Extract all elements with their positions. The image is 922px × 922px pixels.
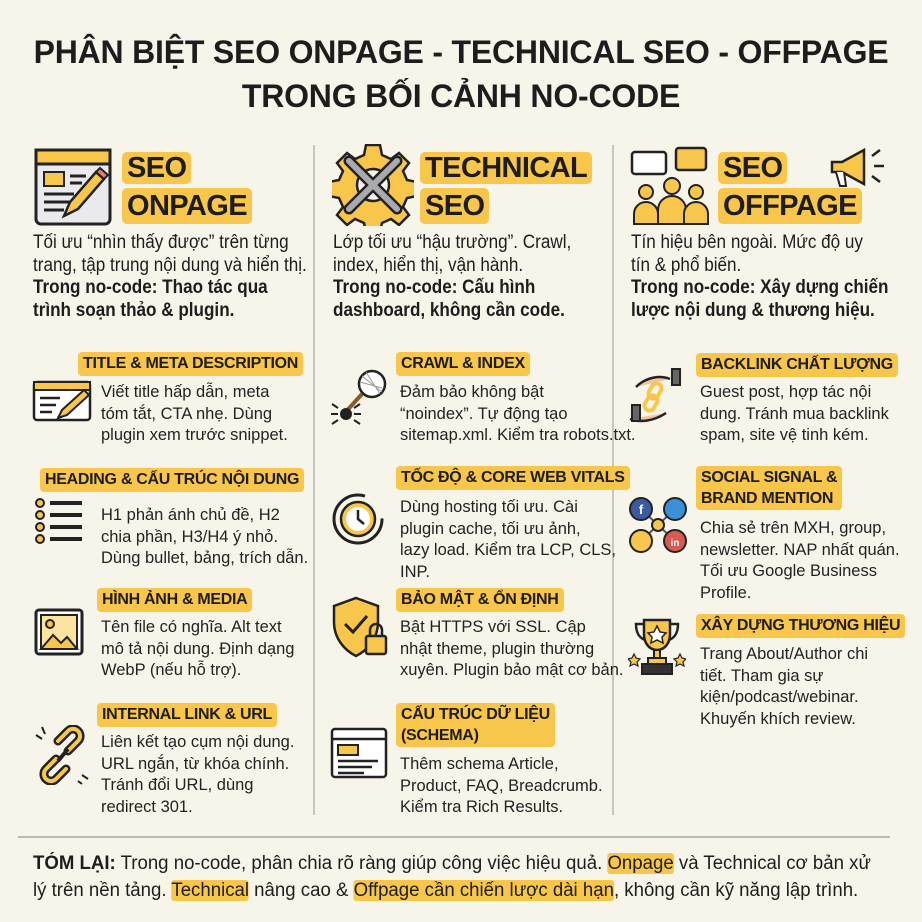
- sub: images: mô tả nội dung. Định dạng: [101, 638, 294, 658]
- intro text: tín & phổ biến.: [631, 254, 741, 276]
- sub: images: HÌNH ẢNH & MEDIA: [102, 591, 247, 608]
- sub: crawl: [331, 352, 636, 444]
- summary text: [33, 852, 871, 901]
- sub: backlink: dung. Tránh mua backlink: [700, 404, 889, 422]
- sub: internal link: Tránh đổi URL, dùng: [101, 775, 253, 794]
- sub: speed: TỐC ĐỘ & CORE WEB VITALS: [401, 469, 625, 486]
- sub: internal link: [36, 703, 294, 816]
- panel: seo offpage: [630, 146, 888, 320]
- sub: heading: [35, 468, 308, 567]
- heading: OFFPAGE: [723, 190, 857, 222]
- sub: title meta: Viết title hấp dẫn, meta: [101, 382, 269, 401]
- sub: schema: Product, FAQ, Breadcrumb.: [400, 776, 603, 794]
- intro text: Tối ưu “nhìn thấy được” trên từng: [33, 232, 289, 253]
- sub: schema: Kiểm tra Rich Results.: [400, 797, 563, 816]
- intro text: Trong no-code: Thao tác qua: [33, 277, 268, 298]
- sub: security: BẢO MẬT & ỔN ĐỊNH: [401, 591, 559, 608]
- icon: people with megaphone: [630, 146, 709, 225]
- sub: images: WebP (nếu hỗ trợ).: [101, 660, 241, 679]
- sub: backlink: [630, 353, 898, 444]
- title: TRONG BỐI CẢNH NO-CODE: [242, 78, 680, 114]
- sub: title meta: tóm tắt, CTA nhẹ. Dùng: [101, 404, 272, 422]
- sub: security: xuyên. Plugin bảo mật cơ bản.: [400, 660, 623, 679]
- sub: security: nhật theme, plugin thường: [400, 638, 594, 658]
- sub: crawl: sitemap.xml. Kiểm tra robots.txt.: [400, 425, 636, 444]
- sub: social: Tối ưu Google Business: [700, 561, 877, 580]
- sub: social: SOCIAL SIGNAL &: [701, 469, 837, 486]
- sub: crawl: Đảm bảo không bật: [400, 382, 544, 401]
- icon: browser pencil: [34, 148, 112, 226]
- intro text: trang, tập trung nội dung và hiển thị.: [33, 254, 307, 276]
- heading: SEO: [127, 152, 186, 184]
- sub: speed: plugin cache, tối ưu ảnh,: [400, 518, 581, 538]
- sub: backlink: BACKLINK CHẤT LƯỢNG: [701, 356, 893, 373]
- intro text: Trong no-code: Xây dựng chiến: [631, 277, 888, 298]
- icon: gear wrench: [332, 144, 414, 226]
- sub: social: f: [639, 502, 644, 517]
- sub: brand: kiện/podcast/webinar.: [700, 687, 859, 706]
- heading: [718, 152, 862, 224]
- sub: images: Tên file có nghĩa. Alt text: [101, 617, 282, 636]
- sub: speed: INP.: [400, 562, 430, 580]
- sub: schema: Thêm schema Article,: [400, 754, 559, 773]
- sub: brand: tiết. Tham gia sự: [700, 666, 823, 684]
- sub: schema: CẤU TRÚC DỮ LIỆU: [401, 706, 550, 723]
- summary text: lý trên nền tảng. Technical nâng cao & Offpage cần chiến lược dài hạn, không cần kỹ năng lập trình.: [33, 880, 858, 901]
- sub: title meta: plugin xem trước snippet.: [101, 425, 288, 444]
- heading: SEO: [723, 152, 782, 184]
- intro text: dashboard, không cần code.: [333, 300, 565, 320]
- heading: TECHNICAL: [425, 152, 587, 184]
- sub: schema: (SCHEMA): [401, 727, 479, 744]
- panel: technical seo: [332, 144, 592, 320]
- sub: speed: lazy load. Kiểm tra LCP, CLS,: [400, 540, 616, 559]
- intro text: Tín hiệu bên ngoài. Mức độ uy: [631, 232, 863, 253]
- sub: social: [629, 466, 900, 602]
- sub: social: in: [671, 538, 679, 549]
- summary text: TÓM LẠI: Trong no-code, phân chia rõ ràng giúp công việc hiệu quả. Onpage và Technical cơ bản xử: [33, 853, 871, 874]
- sub: crawl: “noindex”. Tự động tạo: [400, 404, 568, 422]
- sub: social: BRAND MENTION: [701, 490, 833, 507]
- sub: heading: H1 phản ánh chủ đề, H2: [101, 505, 280, 524]
- sub: internal link: URL ngắn, từ khóa chính.: [101, 754, 289, 772]
- sub: internal link: INTERNAL LINK & URL: [102, 706, 272, 723]
- sub: title meta: [32, 352, 303, 444]
- sub: internal link: Liên kết tạo cụm nội dung.: [101, 732, 294, 751]
- sub: brand: XÂY DỰNG THƯƠNG HIỆU: [701, 617, 900, 634]
- sub: internal link: redirect 301.: [101, 796, 193, 816]
- title: PHÂN BIỆT SEO ONPAGE - TECHNICAL SEO - OFFPAGE: [34, 34, 888, 70]
- intro text: trình soạn thảo & plugin.: [33, 300, 234, 320]
- panel: seo onpage: [33, 148, 307, 320]
- sub: heading: HEADING & CẤU TRÚC NỘI DUNG: [45, 471, 299, 488]
- intro text: Trong no-code: Cấu hình: [333, 277, 535, 298]
- sub: backlink: spam, site vệ tinh kém.: [700, 425, 869, 444]
- sub: social: Chia sẻ trên MXH, group,: [700, 518, 886, 537]
- title: [34, 34, 888, 114]
- sub: security: Bật HTTPS với SSL. Cập: [400, 617, 586, 636]
- sub: images: [34, 588, 294, 679]
- sub: heading: chia phần, H3/H4 ý nhỏ.: [101, 526, 278, 546]
- intro text: [631, 232, 888, 320]
- sub: heading: Dùng bullet, bảng, trích dẫn.: [101, 548, 308, 567]
- intro text: Lớp tối ưu “hậu trường”. Crawl,: [333, 232, 571, 253]
- sub: speed: Dùng hosting tối ưu. Cài: [400, 497, 578, 516]
- sub: backlink: Guest post, hợp tác nội: [700, 382, 871, 401]
- sub: schema: [330, 703, 603, 816]
- heading: [122, 152, 252, 224]
- sub: brand: Khuyến khích review.: [700, 708, 856, 728]
- sub: social: Profile.: [700, 582, 751, 602]
- sub: crawl: CRAWL & INDEX: [401, 355, 525, 372]
- heading: SEO: [425, 190, 484, 222]
- sub: social: newsletter. NAP nhất quán.: [700, 540, 900, 558]
- sub: brand: [628, 614, 905, 728]
- intro text: index, hiển thị, vận hành.: [333, 254, 523, 276]
- heading: [420, 152, 592, 224]
- intro text: lược nội dung & thương hiệu.: [631, 300, 875, 320]
- intro text: [33, 232, 307, 320]
- sub: speed: [332, 466, 630, 580]
- heading: ONPAGE: [127, 190, 247, 222]
- sub: title meta: TITLE & META DESCRIPTION: [83, 355, 298, 372]
- sub: brand: Trang About/Author chi: [700, 644, 868, 663]
- sub: security: [332, 588, 623, 679]
- intro text: [333, 232, 571, 320]
